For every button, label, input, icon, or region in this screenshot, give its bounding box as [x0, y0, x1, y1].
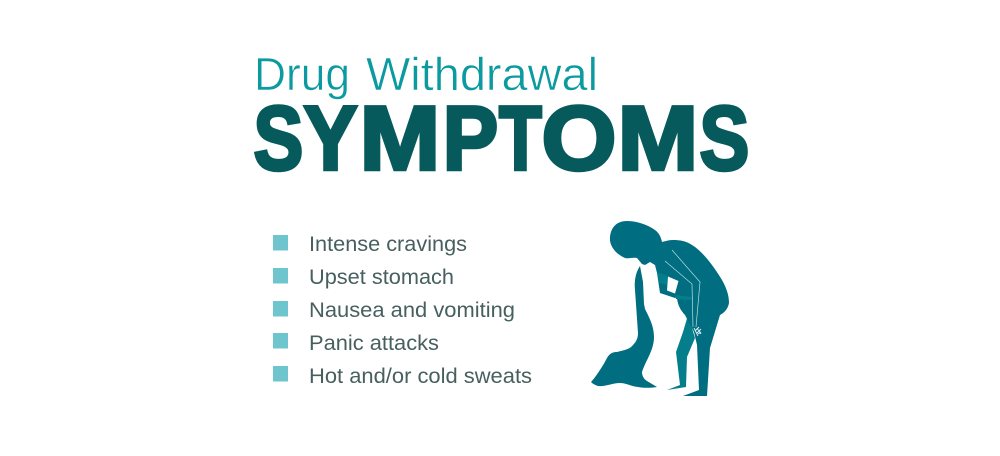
title	[254, 48, 749, 190]
far arm highlight	[657, 272, 668, 285]
head and body	[610, 221, 729, 396]
list item: Nausea and vomiting: Nausea and vomiting	[309, 299, 515, 322]
list item: Intense cravings: Intense cravings	[309, 233, 467, 256]
far leg	[667, 315, 695, 390]
forearm highlight	[675, 295, 692, 300]
arm outline	[665, 250, 701, 336]
title line: SYMPTOMS: S	[700, 88, 749, 190]
title line: SYMPTOMS: Y	[304, 88, 357, 190]
title line: SYMPTOMS: O	[542, 88, 616, 190]
vomit stream	[591, 266, 657, 388]
list item: Upset stomach: Upset stomach	[309, 266, 454, 289]
gap between arm and body	[667, 276, 678, 294]
title line: SYMPTOMS: P	[443, 88, 498, 190]
title line: SYMPTOMS: S	[254, 88, 303, 190]
title line: SYMPTOMS: T	[499, 88, 542, 190]
title line: Drug Withdrawal: Withdrawal	[366, 48, 598, 100]
icon: person bent over vomiting	[591, 221, 729, 396]
title line: SYMPTOMS: M	[360, 88, 440, 190]
list item: Hot and/or cold sweats: Hot and/or cold sweats	[309, 365, 532, 388]
symptoms list	[273, 233, 532, 388]
title line: SYMPTOMS: M	[618, 88, 698, 190]
list item: Panic attacks: Panic attacks	[309, 332, 439, 355]
hand outline	[694, 327, 701, 336]
title line: Drug Withdrawal: Drug	[254, 48, 350, 100]
